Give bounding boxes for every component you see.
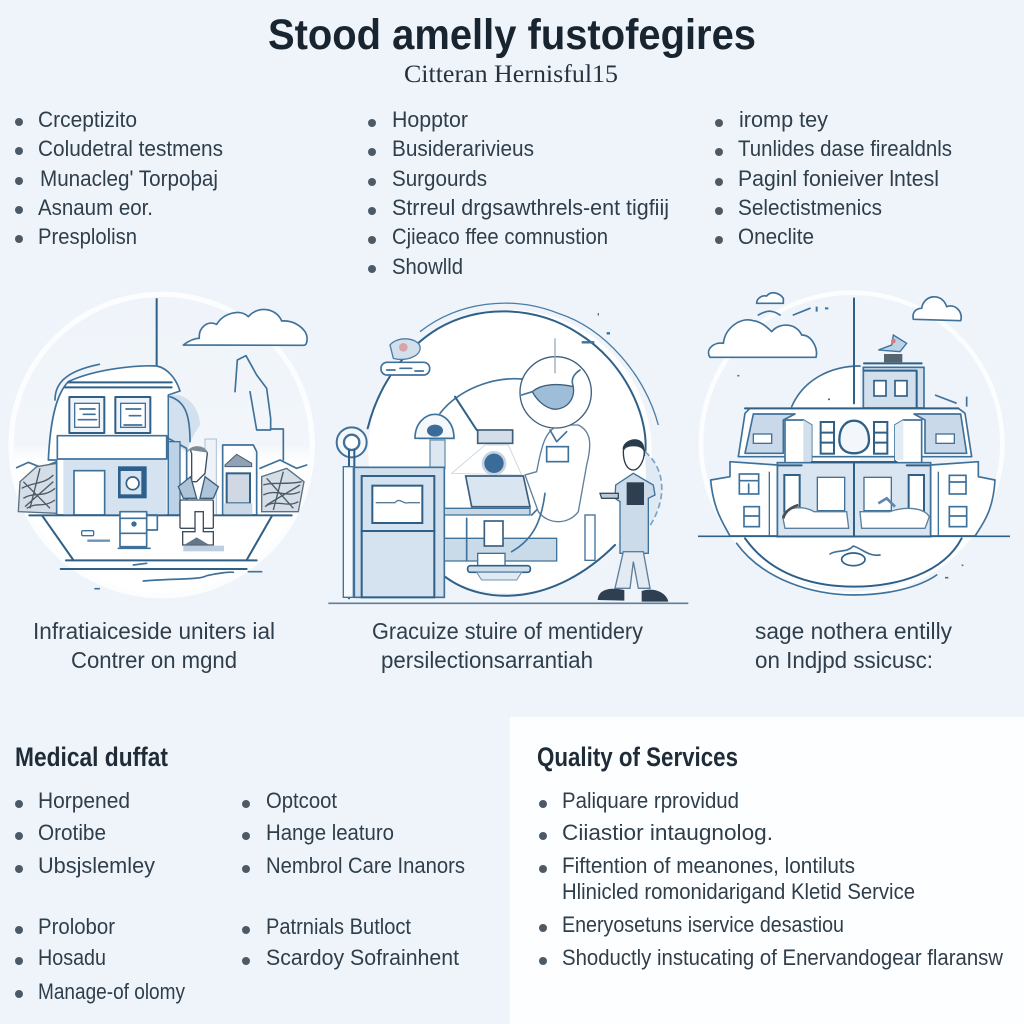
top list: column 3: Tunlides dase firealdnls	[738, 136, 952, 161]
equipment cart	[118, 512, 157, 548]
top list: column 2: Cjieaco ffee comnustion	[392, 224, 608, 249]
top list: column 1: Asnaum eor.	[38, 195, 153, 220]
display	[118, 466, 147, 498]
central window set	[821, 421, 887, 454]
medical list: column 2: Scardoy Sofrainhent	[266, 945, 459, 970]
distant tower	[235, 356, 283, 460]
quality of services list	[539, 788, 1003, 970]
antenna pole	[154, 299, 160, 460]
medical list: column 1: Hosadu	[38, 945, 106, 970]
title: Stood amelly fustofegires	[268, 11, 756, 59]
illustration: medical treatment	[328, 303, 688, 603]
ground line	[328, 601, 688, 606]
panel: quality of services background	[510, 717, 1024, 1024]
top list: column 2: Hopptor	[392, 107, 468, 132]
left wing	[711, 462, 777, 536]
subtitle: Citteran Hernisful15	[404, 61, 618, 88]
medical list: column 1: Prolobor	[38, 914, 115, 939]
screen	[466, 476, 530, 507]
medical list: column 1	[15, 788, 185, 1004]
illustration: infrastructure building	[11, 294, 312, 596]
caption: hospital: on Indjpd ssicusc:	[755, 647, 933, 673]
top tower	[863, 363, 924, 408]
caption: infrastructure	[33, 618, 275, 673]
white dome and lower disc	[737, 366, 967, 588]
quality of services list: Ciiastior intaugnolog.	[562, 820, 773, 845]
circular backdrop	[11, 294, 312, 596]
machine base	[444, 508, 557, 580]
medical list: column 2: Optcoot	[266, 788, 337, 813]
main hospital block	[738, 408, 972, 463]
heading: quality of services: Quality of Services	[537, 742, 738, 772]
dotted swirl	[645, 452, 662, 528]
caption: hospital	[755, 618, 952, 673]
caption: treatment: Gracuize stuire of mentidery	[372, 618, 643, 644]
medical list: column 2: Nembrol Care Inanors	[266, 853, 465, 878]
illustration: hospital building	[698, 293, 1010, 595]
monitor cabinet	[354, 467, 444, 597]
antenna	[851, 298, 857, 403]
quality of services list: Eneryosetuns iservice desastiou	[562, 912, 844, 937]
right wing	[931, 462, 995, 536]
top list: column 1: Munacleg' Torpoþaj	[40, 166, 218, 191]
cloud	[183, 309, 307, 345]
right shrub	[260, 460, 307, 512]
medical list: column 2: Hange leaturo	[266, 820, 394, 845]
top list: column 1	[15, 107, 223, 249]
top list: column 3	[715, 107, 952, 249]
ring stand	[337, 427, 367, 598]
lamp	[415, 414, 454, 468]
top list: column 3: iromp tey	[739, 107, 828, 132]
overhead scanner	[452, 430, 522, 475]
quality of services list: Hlinicled romonidarigand Kletid Service	[562, 879, 915, 904]
flexible tube	[512, 493, 545, 552]
large white disc	[368, 310, 652, 593]
ground floor	[777, 462, 931, 537]
heading: medical: Medical duffat	[15, 742, 168, 772]
top list: column 2: Busiderarivieus	[392, 136, 534, 161]
medical list: column 2	[242, 788, 465, 970]
building	[48, 364, 200, 515]
medical list: column 1: Ubsjslemley	[38, 853, 155, 878]
quality of services list: Fiftention of meanones, lontiluts	[562, 853, 855, 878]
foreground platform	[29, 515, 292, 589]
side post	[585, 515, 595, 560]
windows	[69, 397, 150, 433]
caption: infrastructure: Contrer on mgnd	[71, 647, 237, 673]
caption: infrastructure: Infratiaiceside uniters ial	[33, 618, 275, 644]
door	[74, 471, 105, 515]
top list: column 2: Surgourds	[392, 166, 487, 191]
doctor figure	[520, 338, 591, 522]
person standing	[178, 446, 224, 551]
medical list: column 1: Orotibe	[38, 820, 106, 845]
circular backdrop ring	[701, 293, 1002, 594]
top list: column 2: Showlld	[392, 254, 463, 279]
top list: column 1: Presplolisn	[38, 224, 137, 249]
technician	[598, 439, 668, 602]
beds	[783, 498, 929, 528]
floor emblem	[830, 546, 880, 566]
top list: column 2: Strreul drgsawthrels-ent tigfiij	[392, 195, 669, 220]
side doors	[785, 420, 812, 463]
rooftop ornament	[878, 335, 907, 362]
top list: column 1: Crceptizito	[38, 107, 137, 132]
clouds	[709, 293, 961, 357]
quality of services list: Paliquare rprovidud	[562, 788, 739, 813]
annex kiosk	[205, 439, 257, 515]
left shrub	[17, 462, 57, 513]
caption: treatment: persilectionsarrantiah	[381, 647, 593, 673]
decorative plaque	[381, 339, 430, 375]
top list: column 1: Coludetral testmens	[38, 136, 223, 161]
medical list: column 1: Horpened	[38, 788, 130, 813]
inner arc	[440, 379, 522, 413]
sparkles	[737, 376, 967, 578]
top list: column 3: Paginl fonieiver lntesl	[738, 166, 939, 191]
caption: hospital: sage nothera entilly	[755, 618, 952, 644]
lower concentric arcs	[737, 538, 962, 595]
sparkles	[582, 314, 610, 342]
outer arcs	[420, 303, 658, 425]
top list: column 2	[368, 107, 669, 279]
medical list: column 1: Manage-of olomy	[38, 979, 185, 1004]
top list: column 3: Selectistmenics	[738, 195, 882, 220]
medical list: column 2: Patrnials Butloct	[266, 914, 411, 939]
caption: treatment	[372, 618, 643, 673]
top list: column 3: Oneclite	[738, 224, 814, 249]
ground line	[698, 534, 1010, 539]
